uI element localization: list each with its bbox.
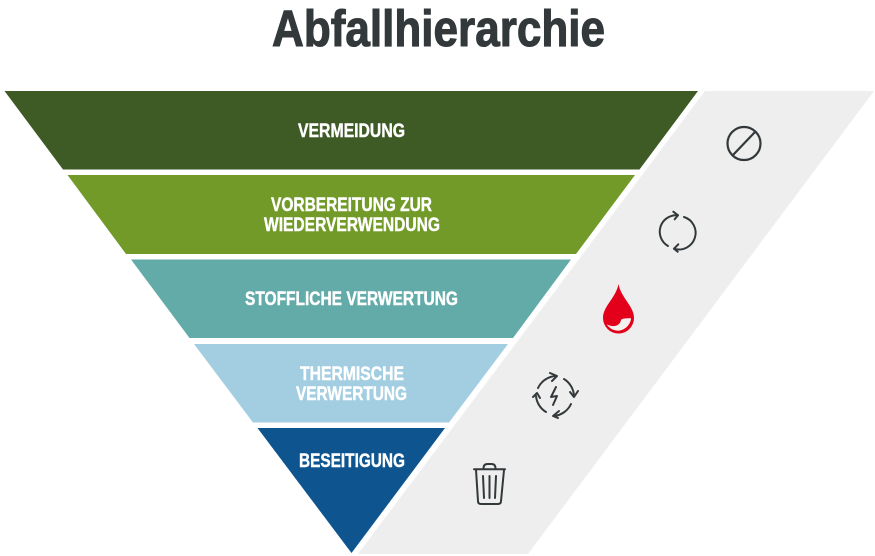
level: Vorbereitung zur Wiederverwendung: VORBEREITUNG ZUR [271, 195, 432, 216]
level: Vermeidung [4, 91, 698, 170]
level: Vorbereitung zur Wiederverwendung: WIEDERVERWENDUNG [264, 215, 440, 236]
icon: prohibition sign [728, 127, 760, 160]
level: Thermische Verwertung [194, 344, 508, 422]
level: Vorbereitung zur Wiederverwendung [68, 175, 635, 254]
level: Thermische Verwertung: VERWERTUNG [296, 384, 407, 405]
level: Stoffliche Verwertung: STOFFLICHE VERWERTUNG [245, 289, 458, 310]
icon: reuse arrows [660, 212, 696, 252]
level: Beseitigung [258, 428, 445, 553]
title: Abfallhierarchie [272, 0, 605, 57]
level: Beseitigung: BESEITIGUNG [299, 451, 405, 472]
level: Thermische Verwertung: THERMISCHE [300, 364, 404, 385]
icon: trash can [474, 464, 505, 504]
level: Vermeidung: VERMEIDUNG [298, 121, 405, 142]
level: Stoffliche Verwertung [131, 260, 571, 338]
panel: grey icon band [358, 91, 874, 554]
icon: red drop [603, 284, 634, 334]
icon: energy recovery arrows [533, 373, 578, 418]
